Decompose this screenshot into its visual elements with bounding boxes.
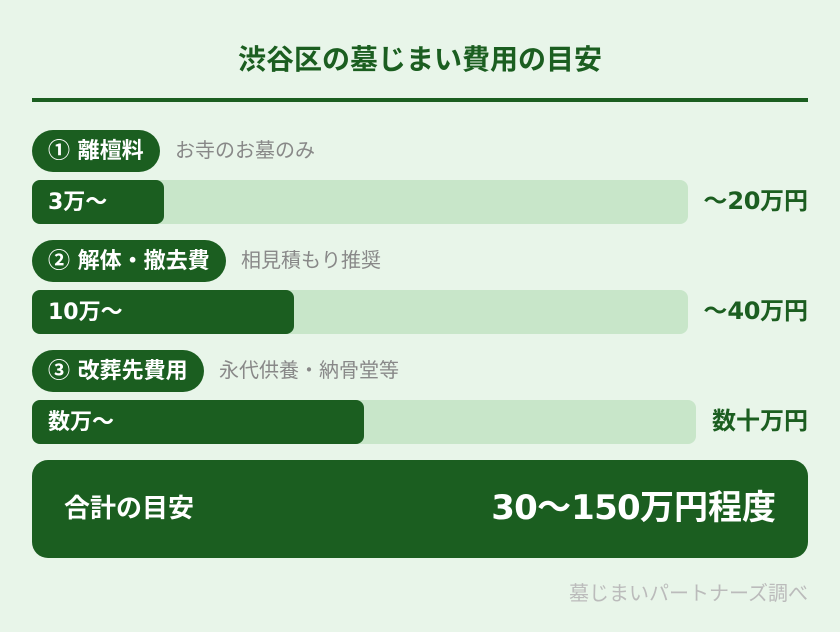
title: 渋谷区の墓じまい費用の目安 [238, 43, 602, 76]
row 2 label [32, 240, 226, 282]
row 1 value: 〜20万円 [703, 187, 808, 215]
row 1 bar fill [32, 180, 164, 224]
row 3 bar fill [32, 400, 364, 444]
row 1 note: お寺のお墓のみ [175, 138, 315, 162]
row 3 value: 数十万円 [712, 407, 808, 435]
row 1 label [32, 130, 160, 172]
row 2 bar fill: 10万〜 [48, 300, 123, 325]
row 2 note: 相見積もり推奨 [241, 248, 381, 272]
row 3 label: ③ 改葬先費用 [48, 353, 188, 385]
row 2 value: 〜40万円 [703, 297, 808, 325]
row 3 bar fill: 数万〜 [48, 410, 114, 435]
row 3 bar track [32, 400, 696, 444]
row 2 bar fill [32, 290, 294, 334]
row 3 label [32, 350, 204, 392]
row 3 note: 永代供養・納骨堂等 [219, 358, 399, 382]
source note: 墓じまいパートナーズ調べ [569, 581, 808, 605]
row 1 bar track [32, 180, 688, 224]
row 2 label: ② 解体・撤去費 [48, 243, 210, 275]
total panel [32, 460, 808, 558]
row 1 label: ① 離檀料 [48, 133, 144, 165]
row 1 bar fill: 3万〜 [48, 190, 107, 215]
row 2 bar track [32, 290, 688, 334]
total label: 合計の目安 [64, 494, 194, 524]
total value: 30〜150万円程度 [491, 488, 776, 528]
